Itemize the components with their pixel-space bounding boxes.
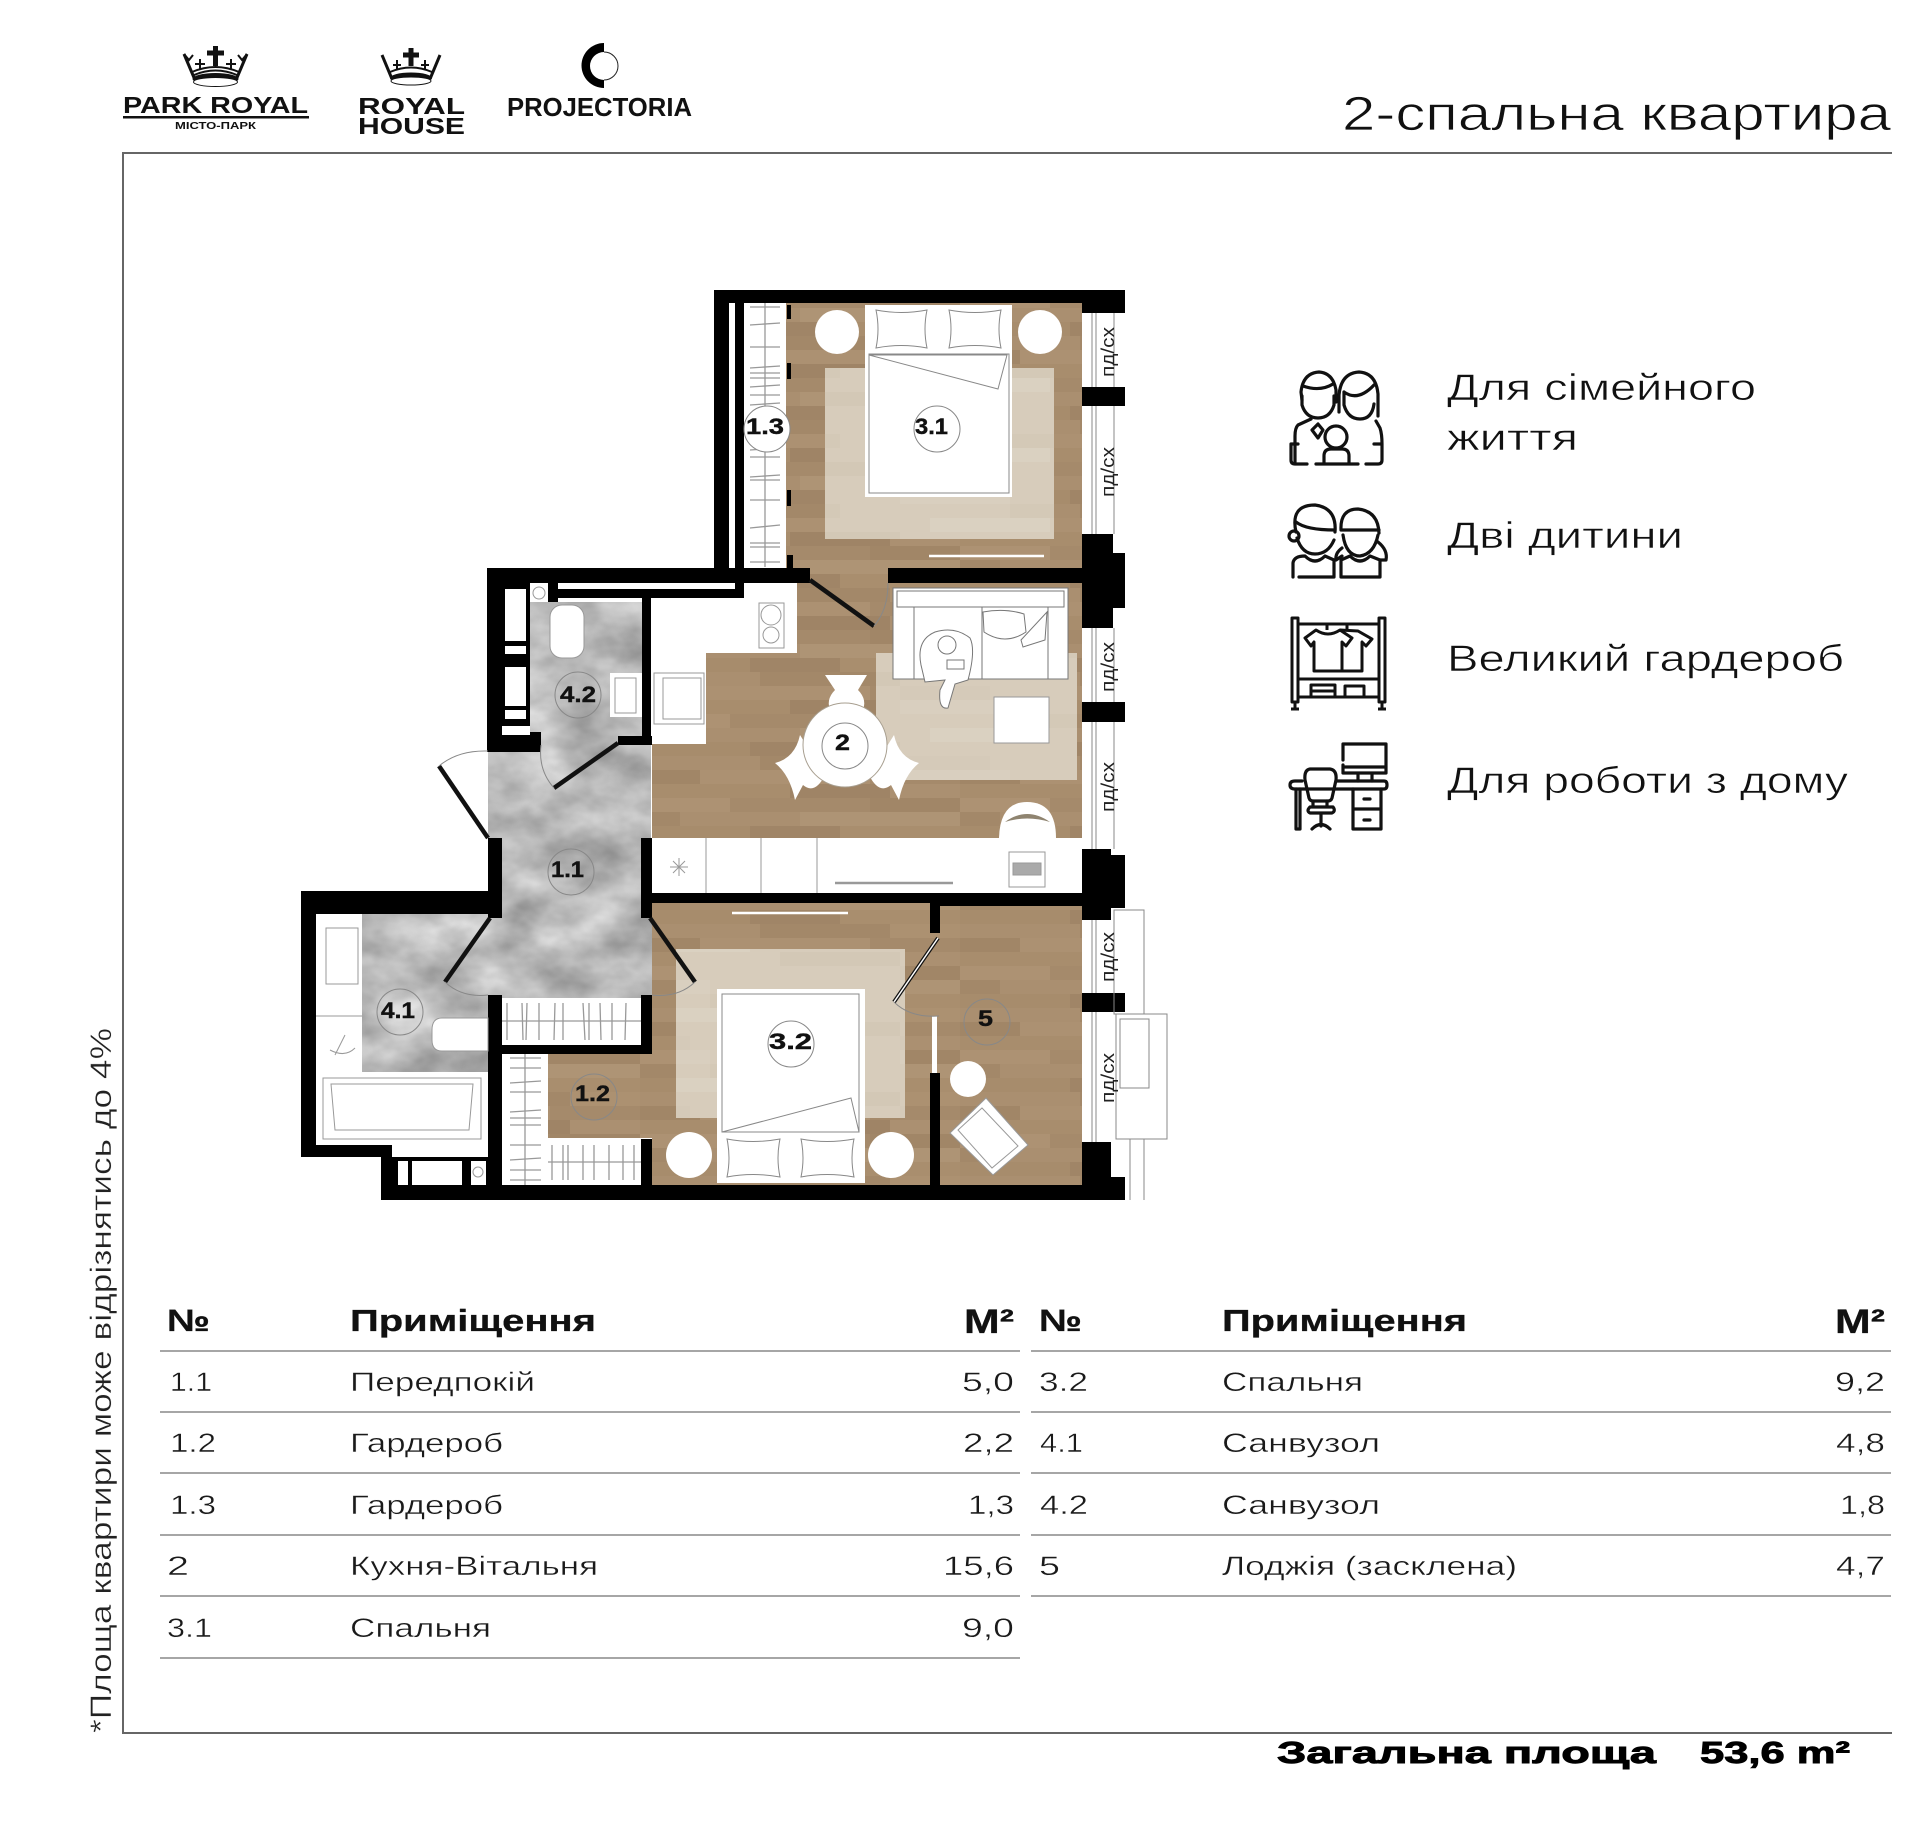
floor: marble <box>362 602 652 1072</box>
logo: Royal House <box>358 48 465 139</box>
table header <box>1039 1303 1885 1341</box>
table rows: 1.1 <box>170 1367 212 1397</box>
table rows: Лоджія (засклена) <box>1222 1551 1517 1581</box>
window labels: пд/сх <box>1098 327 1118 377</box>
window labels: пд/сх <box>1098 762 1118 812</box>
room labels: 4.2 <box>560 682 596 707</box>
loggia furniture <box>950 1061 1028 1175</box>
table rows: Кухня-Вітальня <box>350 1551 598 1581</box>
window frames and balcony <box>1092 313 1167 1200</box>
doors <box>439 580 939 1016</box>
table rows: Передпокій <box>350 1367 535 1397</box>
page frame <box>123 153 1892 1733</box>
text: two children: Дві дитини <box>1447 515 1683 556</box>
feature: work from home <box>1290 744 1849 829</box>
logo: Projectoria <box>507 43 692 122</box>
table header <box>167 1303 1014 1341</box>
table header: Приміщення <box>1222 1303 1467 1338</box>
table: rooms left <box>160 1303 1020 1658</box>
floor: wood <box>548 303 1082 1185</box>
text: work from home: Для роботи з дому <box>1447 760 1849 801</box>
table rows: 3.2 <box>1039 1367 1088 1397</box>
table rows: Спальня <box>1222 1367 1363 1397</box>
table rows: 4.2 <box>1040 1490 1088 1520</box>
table header: М² <box>1835 1303 1885 1341</box>
feature: two children <box>1289 505 1683 577</box>
room labels: 3.1 <box>915 414 948 439</box>
room labels: 3.2 <box>769 1029 812 1054</box>
logo: Park Royal <box>123 46 309 132</box>
bed: bedroom 3.1 <box>815 305 1062 497</box>
walls <box>301 290 1125 1200</box>
table rows: 4,7 <box>1836 1551 1885 1581</box>
window labels <box>1098 327 1118 1103</box>
window labels: пд/сх <box>1098 1053 1118 1103</box>
table header: М² <box>964 1303 1014 1341</box>
table rows <box>167 1367 1014 1643</box>
table rows: Гардероб <box>350 1490 503 1520</box>
logo: Park Royal: PARK ROYAL <box>123 92 308 118</box>
title: 2-спальна квартира <box>1342 88 1891 141</box>
rug: bedroom 3.2 <box>676 949 905 1118</box>
rug: bedroom 3.1 <box>825 368 1054 539</box>
white furniture zones <box>316 303 1082 1185</box>
table rows: 2 <box>167 1551 189 1581</box>
table header: № <box>1039 1303 1082 1338</box>
table rows: 4.1 <box>1040 1428 1083 1458</box>
icon: home office <box>1290 744 1387 829</box>
table rows: 1.3 <box>170 1490 216 1520</box>
icon: family <box>1291 372 1382 464</box>
table rows: 4,8 <box>1836 1428 1885 1458</box>
rug: living room <box>876 653 1077 780</box>
dining table and chairs <box>775 675 919 800</box>
wardrobe rail lines / TVs <box>732 556 1044 913</box>
text: large wardrobe: Великий гардероб <box>1447 638 1844 679</box>
table rows: Гардероб <box>350 1428 503 1458</box>
text: family life: Для сімейного <box>1447 367 1756 408</box>
icon: wardrobe <box>1291 618 1386 709</box>
table rows <box>1039 1367 1885 1581</box>
wardrobes <box>502 303 780 1185</box>
bed: bedroom 3.2 <box>666 989 914 1183</box>
floor plan <box>301 290 1167 1200</box>
side note: *Площа квартири може відрізнятись до 4% <box>85 1028 118 1733</box>
text: family life: життя <box>1447 417 1578 458</box>
table rows: 3.1 <box>167 1613 212 1643</box>
window labels: пд/сх <box>1098 642 1118 692</box>
logo: Royal House: HOUSE <box>358 113 465 139</box>
room labels: 5 <box>978 1006 993 1031</box>
kitchen fixtures <box>654 603 1045 893</box>
text: family life <box>1447 367 1756 458</box>
table rows: 15,6 <box>943 1551 1014 1581</box>
logo: Park Royal: МІСТО-ПАРК <box>175 121 257 132</box>
room labels: 1.1 <box>551 857 584 882</box>
sofa and person <box>893 588 1068 708</box>
window labels: пд/сх <box>1098 932 1118 982</box>
table rows: 9,2 <box>1835 1367 1885 1397</box>
table rows: 5,0 <box>962 1367 1014 1397</box>
room labels <box>377 406 1010 1120</box>
icon: two kids <box>1289 505 1386 577</box>
coffee table <box>994 697 1049 743</box>
total area: 53,6 m² <box>1700 1735 1850 1770</box>
table rows: 2,2 <box>963 1428 1014 1458</box>
bathroom 4.1 fixtures <box>316 928 488 1177</box>
table rows: 1,8 <box>1840 1490 1885 1520</box>
total area: Загальна площа <box>1277 1735 1657 1770</box>
room labels: 1.3 <box>746 414 784 439</box>
table rows: 1.2 <box>170 1428 216 1458</box>
table rows: Спальня <box>350 1613 491 1643</box>
feature: family life <box>1291 367 1756 464</box>
room labels: 4.1 <box>381 998 415 1023</box>
bathroom 4.2 fixtures <box>533 587 642 717</box>
table header: Приміщення <box>350 1303 596 1338</box>
table rows: 5 <box>1039 1551 1060 1581</box>
room labels: 2 <box>835 730 850 755</box>
window labels: пд/сх <box>1098 447 1118 497</box>
table header: № <box>167 1303 210 1338</box>
table rows: 1,3 <box>968 1490 1014 1520</box>
table rows: 9,0 <box>962 1613 1014 1643</box>
table rows: Санвузол <box>1222 1428 1380 1458</box>
feature: large wardrobe <box>1291 618 1844 709</box>
logo: Projectoria: PROJECTORIA <box>507 92 692 122</box>
wall voids <box>398 303 937 1185</box>
logo: Royal House: ROYAL <box>358 93 465 119</box>
desk chair <box>999 802 1056 838</box>
table rows: Санвузол <box>1222 1490 1380 1520</box>
table: rooms right <box>1031 1303 1891 1596</box>
total area <box>1277 1735 1850 1770</box>
room labels: 1.2 <box>575 1081 610 1106</box>
